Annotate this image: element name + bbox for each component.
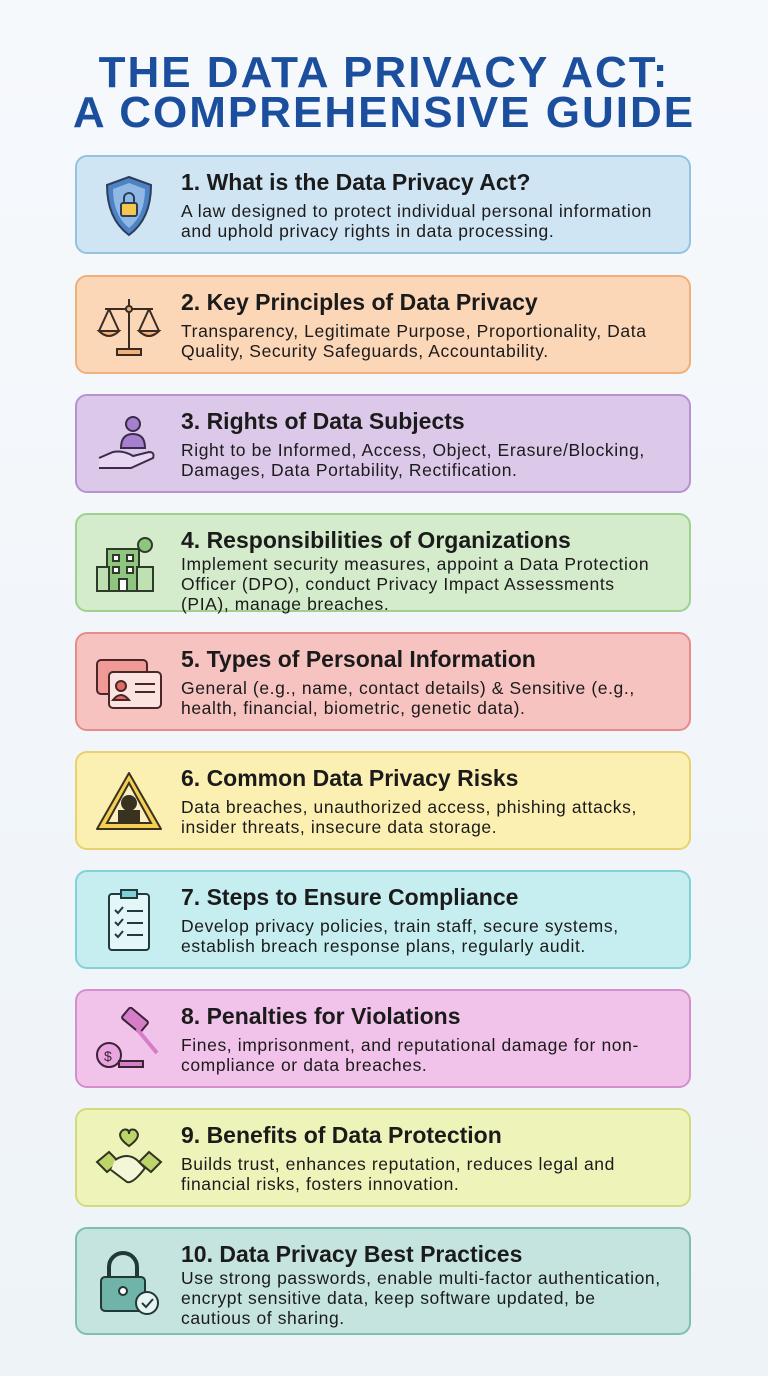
text: Use strong passwords, enable multi-factor authentication, encrypt sensitive data, keep software updated, be cautious of sharing. (181, 1268, 661, 1328)
text: Right to be Informed, Access, Object, Erasure/Blocking, Damages, Data Portability, Rectification. (181, 440, 645, 480)
text: Transparency, Legitimate Purpose, Proportionality, Data Quality, Security Safeguards, Accountability. (181, 321, 647, 361)
title (73, 48, 695, 137)
text: A law designed to protect individual personal information and uphold privacy rights in data processing. (181, 201, 652, 241)
icon: shield lock (106, 176, 152, 236)
heading: 10. Data Privacy Best Practices (181, 1241, 522, 1267)
panel: principles (75, 275, 691, 374)
text: Data breaches, unauthorized access, phishing attacks, insider threats, insecure data storage. (181, 797, 637, 837)
heading: 7. Steps to Ensure Compliance (181, 884, 518, 910)
title: THE DATA PRIVACY ACT: (99, 48, 669, 97)
panel: risks (75, 751, 691, 850)
icon: scales (96, 299, 162, 356)
panel: responsibilities (75, 513, 691, 612)
title: A COMPREHENSIVE GUIDE (73, 88, 695, 137)
icon: building (96, 537, 154, 592)
panel: compliance (75, 870, 691, 969)
heading: 4. Responsibilities of Organizations (181, 527, 571, 553)
icon: gavel money (96, 1007, 158, 1068)
text: Fines, imprisonment, and reputational damage for non-compliance or data breaches. (181, 1035, 639, 1075)
panel: what is (75, 155, 691, 254)
panel: penalties (75, 989, 691, 1088)
panel: benefits (75, 1108, 691, 1207)
heading: 8. Penalties for Violations (181, 1003, 460, 1029)
heading: 6. Common Data Privacy Risks (181, 765, 518, 791)
heading: 5. Types of Personal Information (181, 646, 536, 672)
heading: 2. Key Principles of Data Privacy (181, 289, 538, 315)
icon: hand person (98, 416, 154, 469)
heading: 9. Benefits of Data Protection (181, 1122, 502, 1148)
icon: gavel money: $ (104, 1048, 112, 1064)
text: Builds trust, enhances reputation, reduces legal and financial risks, fosters innovation. (181, 1154, 615, 1194)
icon: padlock check (100, 1251, 159, 1315)
text: Develop privacy policies, train staff, secure systems, establish breach response plans, regularly audit. (181, 916, 619, 956)
text: General (e.g., name, contact details) & Sensitive (e.g., health, financial, biometric, genetic data). (181, 678, 635, 718)
icon: warning hacker (96, 772, 162, 830)
panel: rights (75, 394, 691, 493)
icon: clipboard checklist (108, 889, 150, 951)
panel: types (75, 632, 691, 731)
heading: 3. Rights of Data Subjects (181, 408, 465, 434)
icon: id cards (96, 659, 162, 709)
icon: handshake heart (96, 1128, 162, 1184)
text: Implement security measures, appoint a Data Protection Officer (DPO), conduct Privacy Impact Assessments (PIA), manage breaches. (181, 554, 649, 614)
panel: best practices (75, 1227, 691, 1335)
heading: 1. What is the Data Privacy Act? (181, 169, 530, 195)
